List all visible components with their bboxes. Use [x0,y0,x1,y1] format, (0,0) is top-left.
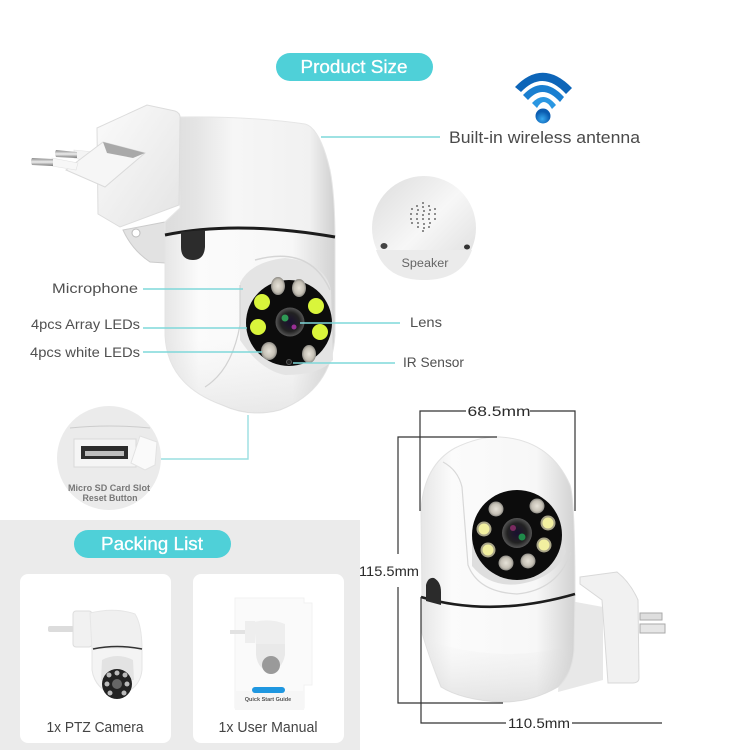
pins [55,150,77,158]
callout labels [30,280,464,370]
dimension labels [359,403,570,731]
card: user manual: 1x User Manual [218,720,318,736]
antenna label: Built-in wireless antenna [449,128,641,147]
card: ptz camera: 1x PTZ Camera [46,720,144,736]
product size pill: Product Size [300,57,408,77]
wall plug [97,105,180,227]
tab [181,230,205,260]
packing list pill [74,530,231,558]
grey LEDs [488,498,544,570]
callout lines [143,289,400,363]
speaker callout [372,176,476,280]
ir sensor [286,360,292,364]
head ridge [443,462,571,594]
yellow LEDs [250,294,328,340]
right camera [421,437,665,702]
face recess [240,258,333,375]
yellow LEDs [478,516,554,556]
product size pill [276,53,433,81]
lens [276,308,304,336]
speaker callout: Speaker [402,258,449,270]
packing list pill: Packing List [101,534,203,554]
callout labels: Microphone [52,280,138,296]
us plug [558,572,665,692]
icon: wifi [515,73,572,124]
lower body [165,228,335,413]
card: user manual: Quick Start Guide [245,697,291,703]
callout labels: 4pcs Array LEDs [31,317,140,332]
black band [165,228,335,237]
mount bracket [123,222,165,263]
card: ptz camera [20,574,171,743]
body [421,594,575,702]
upper body [165,117,335,240]
band [421,594,575,607]
panel: packing list [0,520,360,750]
head [421,437,575,607]
callout labels: IR Sensor [403,354,464,370]
callout labels: 4pcs white LEDs [30,345,140,360]
lens face [246,280,332,366]
sd card callout [57,406,248,510]
card: user manual [193,574,344,743]
callout labels: Lens [410,314,442,330]
tab [426,578,441,605]
grey LEDs [261,277,316,363]
dimensions [398,411,662,723]
sd card callout: Micro SD Card Slot [68,483,151,494]
lens [502,518,532,548]
lens face [472,490,562,580]
sd card callout: Reset Button [82,493,138,504]
speaker holes [410,202,436,232]
pin shafts [74,150,105,165]
prong base [66,142,145,187]
dimension labels: 68.5mm [468,403,530,419]
main camera [31,105,335,413]
dimension labels: 110.5mm [508,715,570,731]
dimension labels: 115.5mm [359,563,419,579]
